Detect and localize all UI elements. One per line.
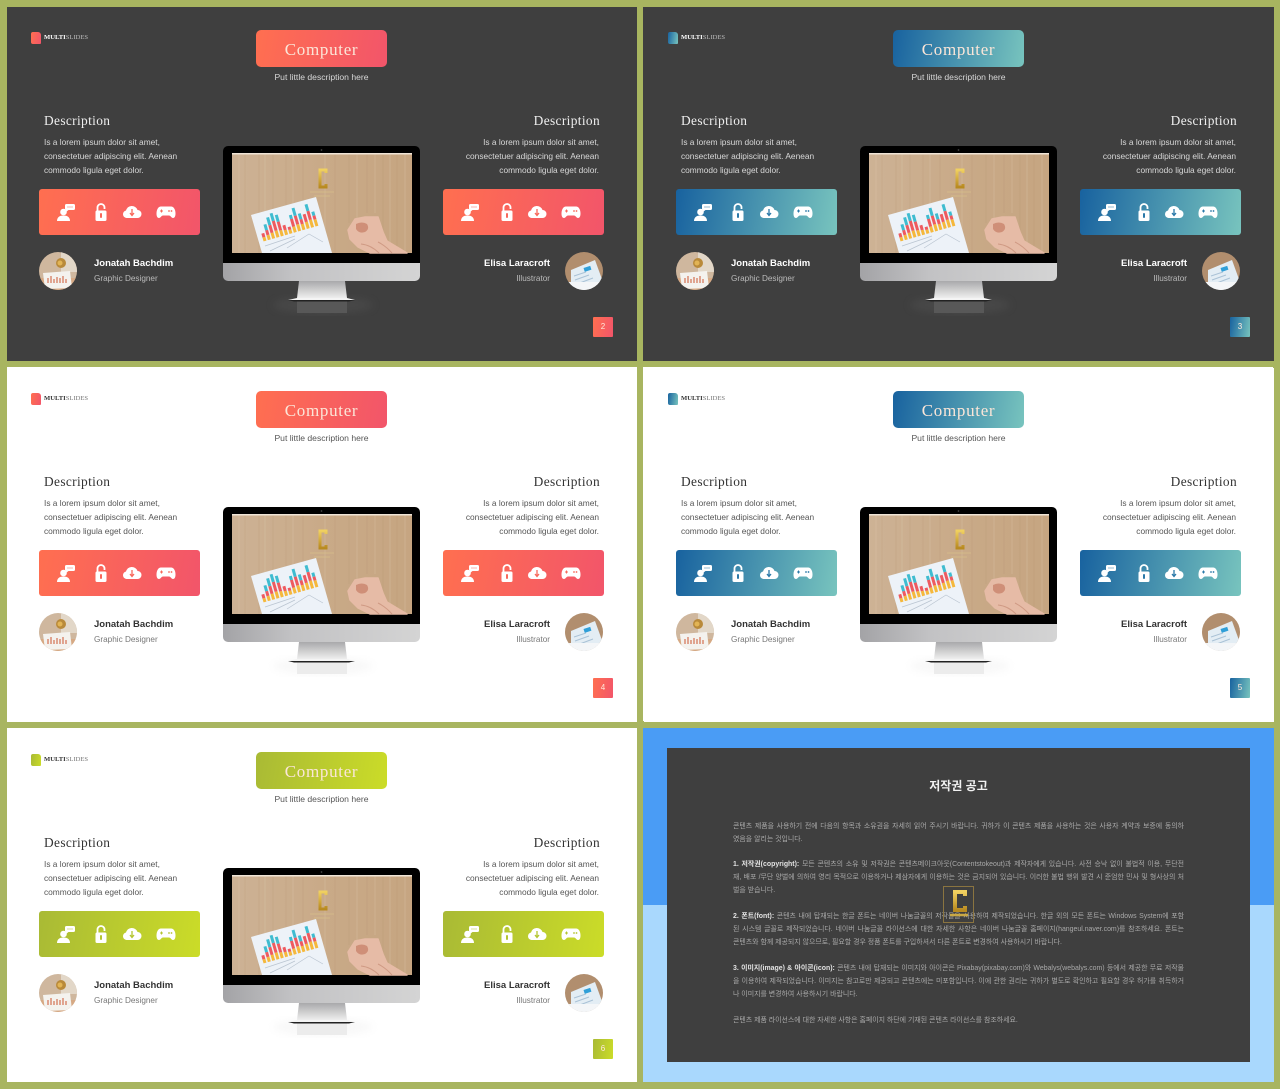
right role: Illustrator (516, 996, 550, 1005)
right heading: Description (1171, 113, 1237, 128)
notice title: 저작권 공고 (929, 779, 988, 793)
left text block (44, 498, 177, 536)
right role: Illustrator (1153, 635, 1187, 644)
right text block: Is a lorem ipsum dolor sit amet, (483, 859, 599, 869)
left name: Jonatah Bachdim (94, 258, 173, 269)
left text block: Is a lorem ipsum dolor sit amet, (681, 498, 797, 508)
left avatar (39, 252, 77, 290)
monitor (223, 868, 420, 1035)
right text block: Is a lorem ipsum dolor sit amet, (1120, 137, 1236, 147)
right name: Elisa Laracroft (1121, 258, 1187, 269)
font clause line 1: 2. 폰트(font): 콘텐츠 내에 탑재되는 한글 폰트는 네이버 나눔글꼴의 저작물을 사용하여 제작되었습니다. 한글 외의 모든 폰트는 Windows System에 포함 (733, 913, 1184, 920)
copyright clause line 2: 재, 배포 /무단 양벌에 의하여 영리 목적으로 이용하거나 제삼자에게 이용하는 것은 금지되어 있습니다. 이러한 불법 행위 발견 시 준엄한 민사 및 형사상의 처 (733, 874, 1184, 881)
right name: Elisa Laracroft (484, 258, 550, 269)
right text block (1103, 137, 1236, 175)
right text block: commodo ligula eget dolor. (1136, 526, 1236, 536)
right name: Elisa Laracroft (484, 980, 550, 991)
intro paragraph end: 였음을 알리는 것입니다. (733, 836, 803, 843)
left role: Graphic Designer (94, 274, 158, 283)
left text block: consectetuer adipiscing elit. Aenean (44, 512, 177, 522)
title button (893, 30, 1024, 67)
page number: 4 (601, 683, 605, 692)
right heading: Description (534, 113, 600, 128)
left text block: consectetuer adipiscing elit. Aenean (681, 512, 814, 522)
left heading: Description (44, 113, 110, 128)
right icon bar (1080, 189, 1241, 235)
logo icon (31, 32, 41, 44)
left text block: consectetuer adipiscing elit. Aenean (44, 873, 177, 883)
monitor (223, 507, 420, 674)
logo icon (31, 393, 41, 405)
intro paragraph: 콘텐츠 제품을 사용하기 전에 다음의 항목과 소유권을 자세히 읽어 주시기 바랍니다. 귀하가 이 콘텐츠 제품을 사용하는 것은 사용자 계약과 보증에 동의하 (733, 823, 1184, 830)
right heading: Description (534, 835, 600, 850)
page number (593, 678, 613, 698)
left avatar (676, 252, 714, 290)
left text block: Is a lorem ipsum dolor sit amet, (44, 137, 160, 147)
right avatar (565, 252, 603, 290)
left text block: commodo ligula eget dolor. (681, 165, 781, 175)
right text block: consectetuer adipiscing elit. Aenean (466, 151, 599, 161)
right text block (466, 859, 599, 897)
left text block: Is a lorem ipsum dolor sit amet, (44, 859, 160, 869)
image clause line 1: 3. 이미지(image) & 아이콘(icon): 콘텐츠 내에 탑재되는 이미지와 아이콘은 Pixabay(pixabay.com)와 Webalys(webalys.com) 등에서 제공한 무료 저작물 (733, 965, 1184, 972)
logo wordmark: MULTISLIDES (681, 34, 725, 41)
left avatar (39, 613, 77, 651)
left role: Graphic Designer (731, 635, 795, 644)
right text block: consectetuer adipiscing elit. Aenean (1103, 512, 1236, 522)
right text block (1103, 498, 1236, 536)
right text block (466, 498, 599, 536)
left avatar (676, 613, 714, 651)
image clause line 3: 나 이미지를 변경하여 사용하시기 바랍니다. (733, 991, 858, 998)
left icon bar (676, 550, 837, 596)
right name: Elisa Laracroft (1121, 619, 1187, 630)
left text block: commodo ligula eget dolor. (44, 887, 144, 897)
font clause line 2: 된 시스템 글꼴로 제작되었습니다. 네이버 나눔글꼴 라이선스에 대한 자세한 사항은 네이버 나눔글꼴 홈페이지(hangeul.naver.com)를 참조하세요. 폰트는 (733, 926, 1184, 933)
right avatar (1202, 252, 1240, 290)
right icon bar (443, 189, 604, 235)
logo wordmark: MULTISLIDES (44, 395, 88, 402)
right text block: consectetuer adipiscing elit. Aenean (466, 873, 599, 883)
left text block: Is a lorem ipsum dolor sit amet, (44, 498, 160, 508)
right avatar (565, 613, 603, 651)
right role: Illustrator (516, 635, 550, 644)
left text block: commodo ligula eget dolor. (44, 165, 144, 175)
image clause line 2: 을 이용하여 제작되었습니다. 이미지는 참고로만 제공되고 콘텐츠에는 미포함입니다. 이에 관한 권리는 귀하가 별도로 확인하고 필요할 경우 허가를 취득하거 (733, 978, 1184, 985)
right heading: Description (1171, 474, 1237, 489)
logo wordmark: MULTISLIDES (44, 34, 88, 41)
left text block (681, 498, 814, 536)
left text block: Is a lorem ipsum dolor sit amet, (681, 137, 797, 147)
notice card (667, 748, 1250, 1062)
left text block: commodo ligula eget dolor. (44, 526, 144, 536)
right role: Illustrator (516, 274, 550, 283)
right text block: Is a lorem ipsum dolor sit amet, (483, 137, 599, 147)
panel: dark coral slide (7, 7, 637, 361)
left name: Jonatah Bachdim (94, 619, 173, 630)
copyright clause line 3: 벌을 받습니다. (733, 887, 775, 894)
left name: Jonatah Bachdim (731, 619, 810, 630)
title button (256, 30, 387, 67)
title button: Computer (285, 401, 358, 420)
panel: light coral slide (7, 368, 637, 722)
page number (1230, 317, 1250, 337)
left heading: Description (681, 474, 747, 489)
copyright clause line 1: 1. 저작권(copyright): 모든 콘텐츠의 소유 및 저작권은 콘텐츠메이크아웃(Contentstokeout)과 제작자에게 있습니다. 사전 승낙 없이 불법적 이용, 무단전 (733, 861, 1184, 868)
title button: Computer (922, 401, 995, 420)
logo wordmark: MULTISLIDES (44, 756, 88, 763)
panel: copyright notice slide (643, 728, 1274, 1082)
title button: Computer (922, 40, 995, 59)
right name: Elisa Laracroft (484, 619, 550, 630)
right text block: Is a lorem ipsum dolor sit amet, (1120, 498, 1236, 508)
right text block: commodo ligula eget dolor. (499, 526, 599, 536)
left icon bar (39, 911, 200, 957)
title button: Computer (285, 762, 358, 781)
right icon bar (443, 550, 604, 596)
right text block: consectetuer adipiscing elit. Aenean (466, 512, 599, 522)
page number (593, 1039, 613, 1059)
left heading: Description (44, 474, 110, 489)
left text block (681, 137, 814, 175)
monitor (860, 507, 1057, 674)
page number (593, 317, 613, 337)
left text block (44, 137, 177, 175)
title button (256, 391, 387, 428)
page number: 2 (601, 322, 605, 331)
right avatar (565, 974, 603, 1012)
left avatar (39, 974, 77, 1012)
panel: light blue slide (644, 368, 1274, 722)
right text block (466, 137, 599, 175)
closing line: 콘텐츠 제품 라이선스에 대한 자세한 사항은 홈페이지 하단에 기재된 콘텐츠 라이선스를 참조하세요. (733, 1017, 1018, 1024)
right role: Illustrator (1153, 274, 1187, 283)
subtitle: Put little description here (911, 72, 1006, 82)
monitor (223, 146, 420, 313)
subtitle: Put little description here (911, 433, 1006, 443)
monitor (860, 146, 1057, 313)
left icon bar (39, 550, 200, 596)
page number: 5 (1238, 683, 1242, 692)
left text block: consectetuer adipiscing elit. Aenean (681, 151, 814, 161)
left role: Graphic Designer (94, 996, 158, 1005)
title button (893, 391, 1024, 428)
left text block: consectetuer adipiscing elit. Aenean (44, 151, 177, 161)
left icon bar (39, 189, 200, 235)
page number: 6 (601, 1044, 605, 1053)
right text block: Is a lorem ipsum dolor sit amet, (483, 498, 599, 508)
panel: dark blue slide (644, 7, 1274, 361)
right text block: commodo ligula eget dolor. (499, 887, 599, 897)
logo icon (668, 32, 678, 44)
right avatar (1202, 613, 1240, 651)
right text block: consectetuer adipiscing elit. Aenean (1103, 151, 1236, 161)
title button (256, 752, 387, 789)
subtitle: Put little description here (274, 433, 369, 443)
left icon bar (676, 189, 837, 235)
logo icon (668, 393, 678, 405)
title button: Computer (285, 40, 358, 59)
left name: Jonatah Bachdim (731, 258, 810, 269)
left text block (44, 859, 177, 897)
gold logo watermark (943, 886, 974, 923)
left heading: Description (44, 835, 110, 850)
left text block: commodo ligula eget dolor. (681, 526, 781, 536)
right heading: Description (534, 474, 600, 489)
panel: light green slide (7, 729, 637, 1082)
right text block: commodo ligula eget dolor. (1136, 165, 1236, 175)
left role: Graphic Designer (731, 274, 795, 283)
page number (1230, 678, 1250, 698)
page number: 3 (1238, 322, 1242, 331)
logo wordmark: MULTISLIDES (681, 395, 725, 402)
subtitle: Put little description here (274, 794, 369, 804)
subtitle: Put little description here (274, 72, 369, 82)
right icon bar (1080, 550, 1241, 596)
left heading: Description (681, 113, 747, 128)
left name: Jonatah Bachdim (94, 980, 173, 991)
left role: Graphic Designer (94, 635, 158, 644)
right icon bar (443, 911, 604, 957)
font clause line 3: 콘텐츠와 함께 제공되지 않으므로, 필요할 경우 정품 폰트를 구입하셔서 다른 폰트로 변경하여 사용하시기 바랍니다. (733, 939, 1062, 946)
right text block: commodo ligula eget dolor. (499, 165, 599, 175)
logo icon (31, 754, 41, 766)
